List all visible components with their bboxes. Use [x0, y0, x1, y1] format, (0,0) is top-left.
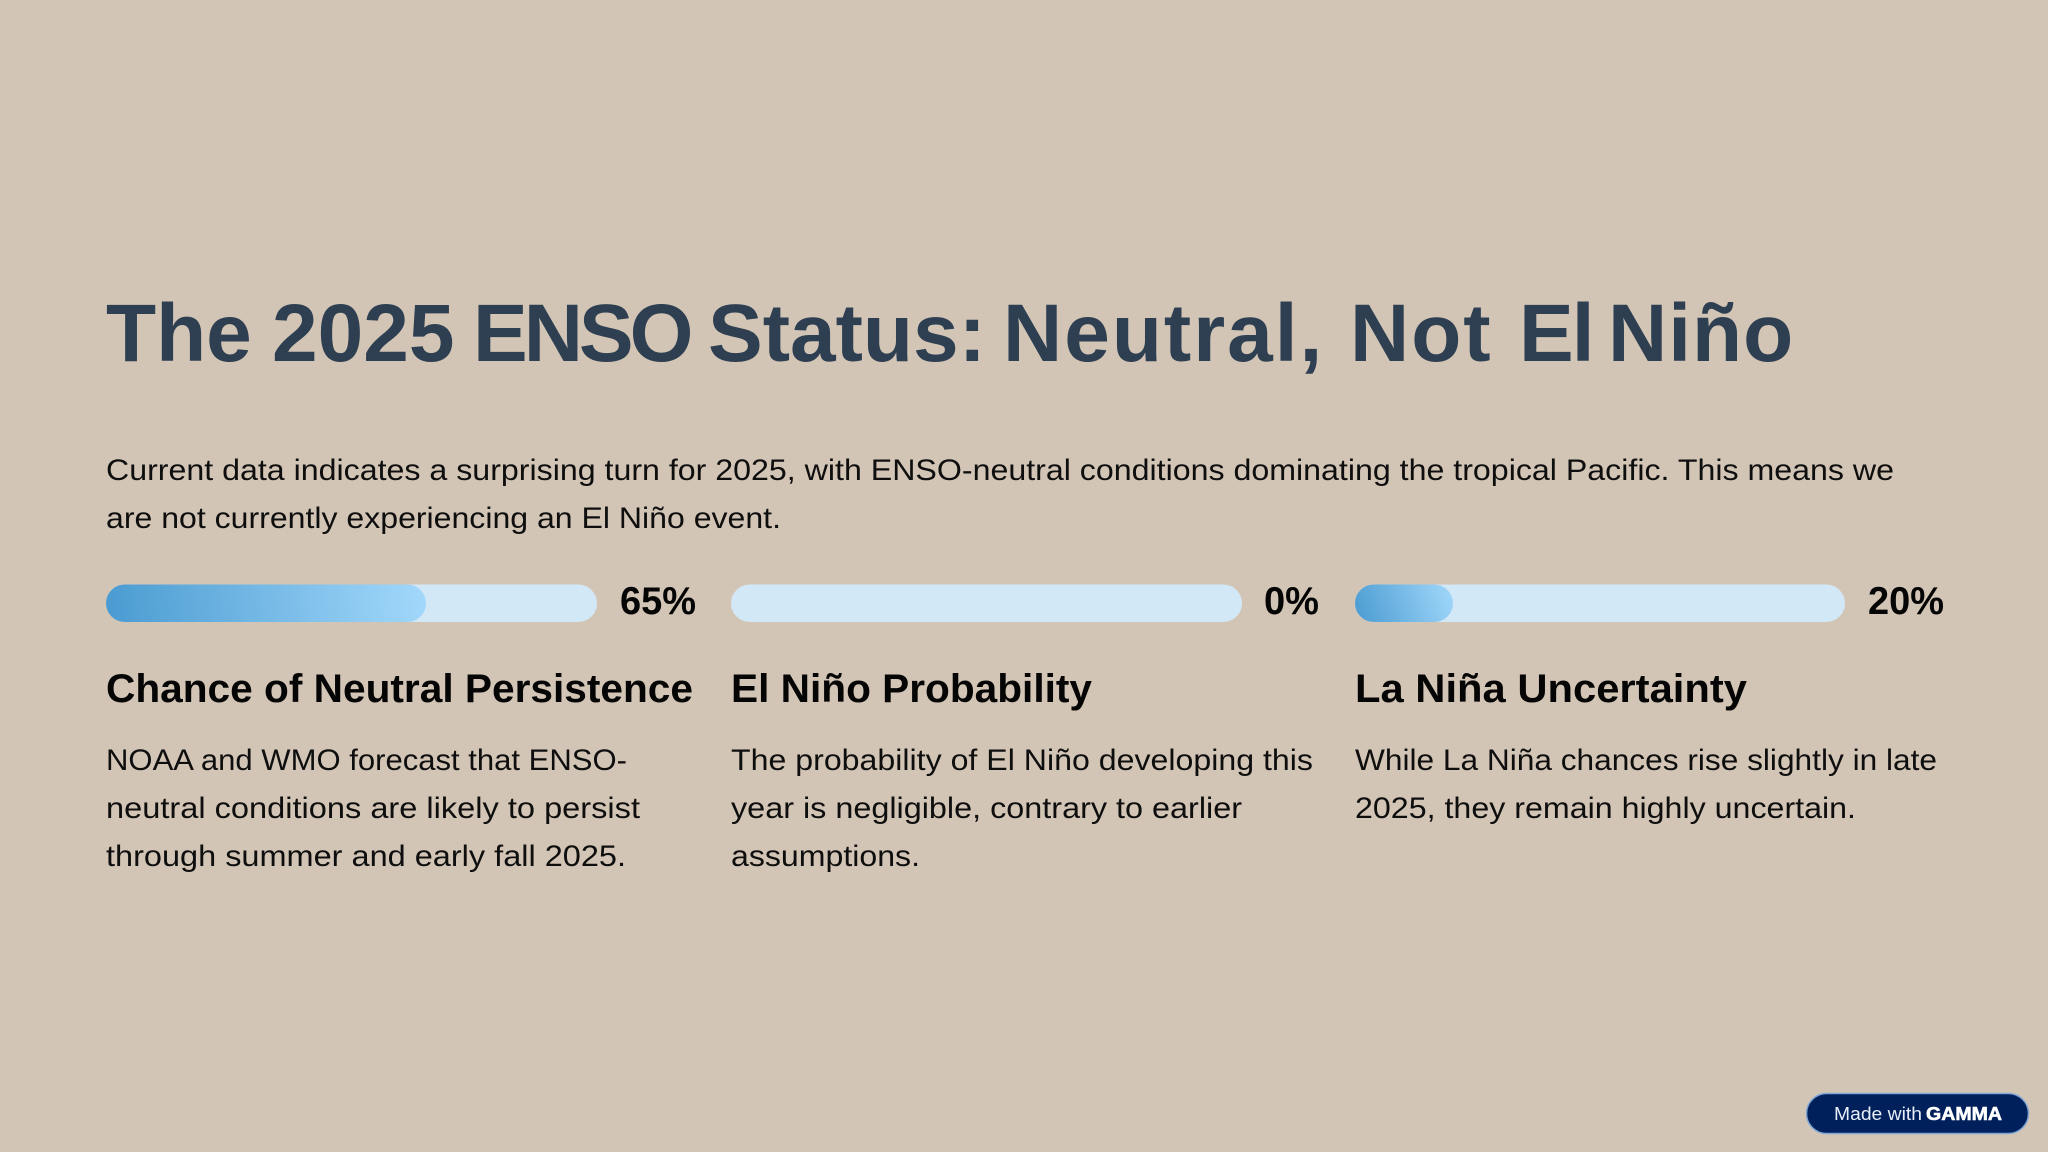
title: 2025 — [272, 288, 454, 379]
panel: neutral persistence — [106, 580, 696, 873]
intro text block: Current data indicates a surprising turn for 2025, with ENSO-neutral conditions dominating the tropical Pacific. This means we — [106, 454, 1894, 487]
value: 0%: 0% — [1264, 580, 1319, 623]
title: Status: — [708, 288, 986, 379]
description: neutral persistence: neutral conditions are likely to persist — [106, 792, 641, 825]
heading: El Niño probability: El Niño Probability — [731, 667, 1093, 711]
intro text block — [106, 454, 1894, 535]
progress bar: 65% — [106, 584, 597, 622]
description: La Niña uncertainty: 2025, they remain highly uncertain. — [1355, 792, 1856, 825]
description: El Niño probability: year is negligible, contrary to earlier — [731, 792, 1242, 825]
panel: El Niño probability — [731, 580, 1319, 873]
progress bar: 0% — [731, 584, 1242, 622]
title: Not — [1350, 288, 1493, 379]
intro text block: are not currently experiencing an El Niño event. — [106, 502, 781, 535]
value: 20%: 20% — [1868, 580, 1944, 623]
badge: Made with Gamma: GAMMA — [1926, 1103, 2002, 1124]
description: La Niña uncertainty — [1355, 744, 1937, 825]
heading: neutral persistence: Chance of Neutral Persistence — [106, 667, 693, 711]
panel: La Niña uncertainty — [1355, 580, 1944, 825]
description: neutral persistence: NOAA and WMO forecast that ENSO- — [106, 744, 627, 777]
title — [106, 288, 1794, 379]
description: neutral persistence: through summer and early fall 2025. — [106, 840, 626, 873]
title: The — [106, 288, 252, 379]
title: Niño — [1608, 288, 1794, 379]
title: Neutral, — [1003, 288, 1324, 379]
value: 65%: 65% — [620, 580, 696, 623]
description: El Niño probability: The probability of El Niño developing this — [731, 744, 1313, 777]
badge: Made with Gamma: Made with — [1834, 1103, 1922, 1124]
description: El Niño probability — [731, 744, 1313, 873]
badge: Made with Gamma — [1806, 1094, 2028, 1134]
title: ENSO — [473, 288, 691, 379]
heading: La Niña uncertainty: La Niña Uncertainty — [1355, 667, 1748, 711]
description: La Niña uncertainty: While La Niña chances rise slightly in late — [1355, 744, 1937, 777]
description: neutral persistence — [106, 744, 641, 873]
progress bar: 20% — [1355, 584, 1845, 622]
description: El Niño probability: assumptions. — [731, 840, 920, 873]
title: El — [1519, 288, 1592, 379]
